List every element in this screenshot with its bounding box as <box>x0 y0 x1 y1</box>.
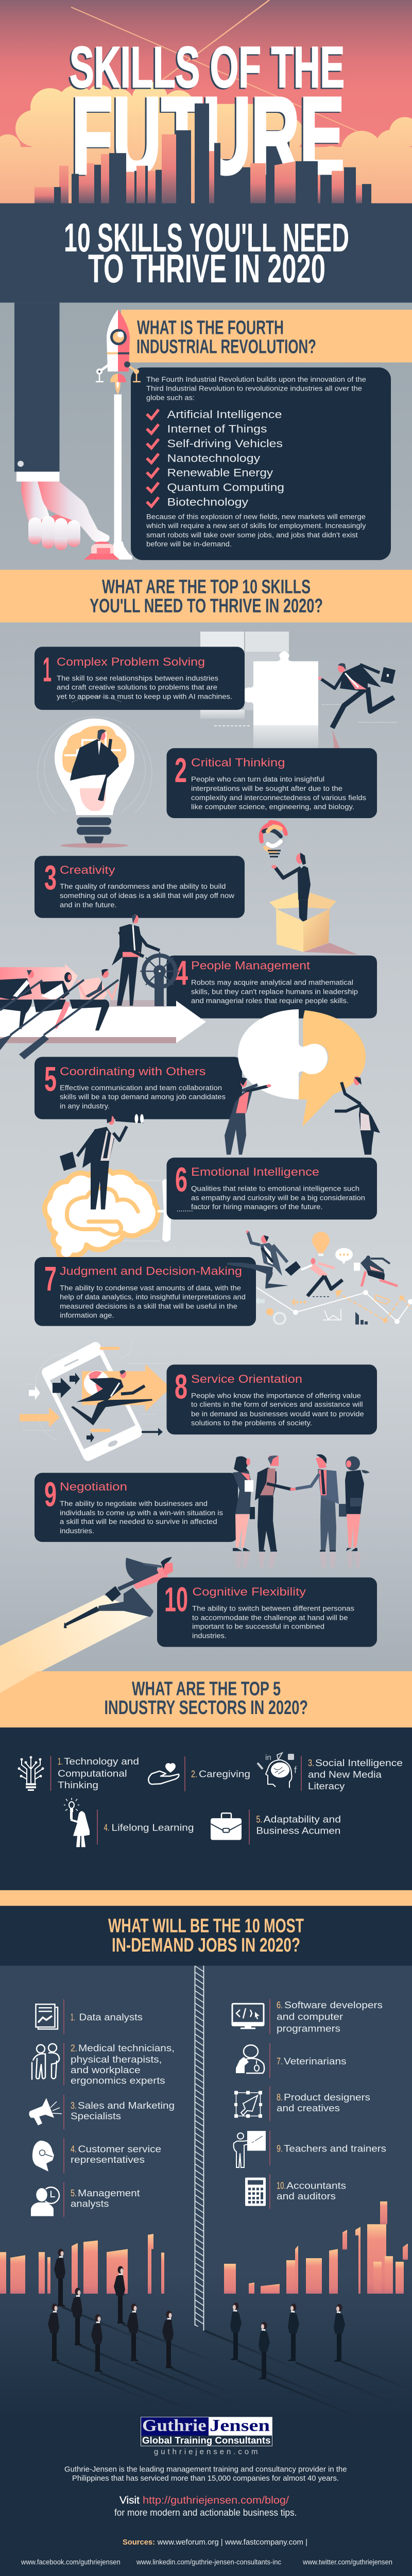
skill 2 card <box>167 748 377 818</box>
skill 6 card: Qualities that relate to emotional intelligence such <box>191 1184 359 1193</box>
skill 9 card: Negotiation <box>60 1480 127 1493</box>
technology list: Artificial Intelligence <box>167 408 282 421</box>
skill 2 card: 2 <box>175 752 187 790</box>
text panel: globe such as: <box>146 393 195 401</box>
job 6: Software developers <box>284 1999 383 2010</box>
skill 2 card: Critical Thinking <box>191 756 285 769</box>
skill 5 card: skills will be a top demand among job candidates <box>60 1093 226 1100</box>
skill 10 light beam <box>0 1595 150 1673</box>
clouds <box>0 81 412 204</box>
illustration: man with telescope <box>60 1114 144 1171</box>
grey middle background <box>0 302 412 1722</box>
sources: Sources: <box>123 2538 155 2547</box>
contrails <box>71 0 357 131</box>
about text: Guthrie-Jensen is the leading management training and consultancy provider in the <box>64 2465 347 2473</box>
skill 4 card: Robots may acquire analytical and mathematical <box>191 978 353 987</box>
icon: calculator <box>245 2178 266 2206</box>
skill 1 card: yet to appear is a must to keep up with AI machines. <box>57 692 232 700</box>
illustration: men joining speech-bubble puzzle <box>225 1009 380 1155</box>
skill 3 card: something out of ideas is a skill that will pay off now <box>60 891 235 900</box>
people and shadows <box>48 2249 412 2421</box>
Guthrie-Jensen logo: Jensen <box>210 2417 270 2435</box>
skill 8 card: to clients in the form of services and assistance will <box>191 1400 363 1409</box>
job 3: Sales and Marketing <box>78 2100 175 2111</box>
sector 1 text: Computational <box>58 1768 127 1778</box>
rocket stick and smoke <box>113 394 132 560</box>
job 2 <box>32 2043 175 2086</box>
skill 6 card: factor for hiring managers of the future. <box>191 1202 323 1211</box>
skill 2 card: interpretations will be sought after due to the <box>191 784 342 792</box>
sky background <box>0 0 412 204</box>
job 4: 4. <box>71 2144 77 2154</box>
skill 2 card: People who can turn data into insightful <box>191 775 324 783</box>
skill 3 card: 3 <box>44 859 57 897</box>
skill 10 card: Cognitive Flexibility <box>192 1585 306 1598</box>
section: top 5 industry sectors <box>0 1727 412 1890</box>
skill 7 card <box>35 1257 273 1326</box>
job 5 <box>31 2187 140 2216</box>
job 8: 8. <box>277 2092 283 2103</box>
skill 9 card <box>35 1473 238 1542</box>
job 2: ergonomics experts <box>71 2075 165 2086</box>
sector 3 text <box>308 1757 403 1791</box>
illustration: brain and splitter arrow <box>45 1161 171 1260</box>
icon: teacher at board <box>234 2131 266 2167</box>
skill 6 card <box>167 1158 377 1219</box>
skill 3 card: The quality of randomness and the ability to build <box>60 882 226 890</box>
skill 1 card <box>35 647 245 710</box>
job 4: Customer service <box>78 2144 161 2154</box>
skill 4 card: 4 <box>175 954 188 993</box>
job 10: and auditors <box>277 2191 336 2201</box>
job 6: 6. <box>277 1999 283 2010</box>
job 2: Medical technicians, <box>78 2043 175 2054</box>
website address: guthriejensen.com <box>154 2448 258 2456</box>
icon: launch button <box>84 541 120 560</box>
section heading: in-demand jobs <box>0 1906 412 1965</box>
skill 10 card: industries. <box>192 1631 227 1639</box>
section heading band: top 5 sectors <box>0 1671 412 1727</box>
icon: brain with social networks: f <box>294 1765 297 1775</box>
section: top 5 industry sectors: 5. <box>256 1814 262 1825</box>
footer social links: www.facebook.com/guthriejensen <box>21 2557 121 2566</box>
job 7 <box>236 2045 346 2073</box>
skill 4 card: People Management <box>191 959 311 972</box>
job 6 <box>232 1999 383 2033</box>
skyline in front of title <box>35 104 371 204</box>
icon: data report <box>36 2004 58 2029</box>
rowers <box>0 969 117 1030</box>
illustration: painted bulb, man in box <box>258 821 357 955</box>
skill 6 card: Emotional Intelligence <box>191 1165 319 1178</box>
sector 5 text: Business Acumen <box>256 1825 340 1836</box>
job 10: 10. <box>277 2180 286 2191</box>
skill 4 card: skills, but they can't replace humans in leadership <box>191 987 358 995</box>
icon: woman with lightbulb <box>64 1798 90 1847</box>
skill 5 card: 5 <box>44 1060 57 1098</box>
icon: caring hand <box>148 1763 179 1784</box>
icon: computer with code <box>232 2004 264 2029</box>
technology list: Internet of Things <box>167 422 267 435</box>
technology list: Self-driving Vehicles <box>167 437 283 450</box>
ladder divider <box>195 1965 204 2331</box>
job 3: Specialists <box>71 2111 121 2122</box>
illustration: puzzle piece <box>200 632 397 749</box>
skill 7 card: help of data analytics, into insightful interpretations and <box>60 1293 246 1301</box>
illustration: flying businessman <box>64 1557 173 1628</box>
illustration: businesspeople racing over chart <box>246 1230 412 1325</box>
skill 3 card <box>35 856 245 918</box>
job 5: Management <box>78 2188 140 2198</box>
text panel: The Fourth Industrial Revolution builds upon the innovation of the <box>146 375 366 383</box>
icon: manager with clock <box>31 2187 59 2216</box>
skill 1 card: and craft creative solutions to problems that are <box>57 683 217 691</box>
sector 5 text <box>256 1814 341 1836</box>
job 7: 7. <box>277 2056 283 2066</box>
section heading band: top 5 sectors: INDUSTRY SECTORS IN 2020? <box>104 1697 308 1719</box>
skill 7 card: Judgment and Decision-Making <box>60 1264 242 1277</box>
skill 7 card: 7 <box>44 1260 57 1298</box>
icon: brain with social networks: in <box>265 1754 271 1762</box>
skill 8 card: People who know the importance of offering value <box>191 1392 361 1399</box>
footer social links: www.twitter.com/guthriejensen <box>302 2557 392 2566</box>
technology list: Quantum Computing <box>167 481 284 494</box>
icon: veterinarian with dog <box>236 2045 264 2073</box>
skill 10 card: The ability to switch between different personas <box>192 1604 354 1613</box>
text panel: which will require a new set of skills for employment. Increasingly <box>146 521 366 530</box>
job 10 <box>245 2178 346 2206</box>
illustration: rocket <box>96 309 141 394</box>
job 1 <box>36 2004 143 2029</box>
job 3: 3. <box>71 2100 77 2111</box>
orange divider band <box>0 1890 412 1906</box>
job 4 <box>32 2141 161 2172</box>
skill 10 card: 10 <box>164 1581 188 1619</box>
title <box>68 35 345 198</box>
job 4: representatives <box>71 2154 145 2165</box>
sector 3 text: Social Intelligence <box>315 1757 403 1768</box>
section: top 5 industry sectors: 2. <box>191 1769 197 1779</box>
sector 1 text: Thinking <box>58 1780 98 1790</box>
technology list <box>167 408 284 508</box>
skill 8 card: solutions to the problems of society. <box>191 1419 312 1427</box>
skill 7 card: The ability to condense vast amounts of data, with the <box>60 1284 241 1292</box>
illustration: lightbulb with thinker <box>38 697 152 848</box>
text panel: Third Industrial Revolution to revolutionize industries all over the <box>146 384 362 393</box>
skill 2 card: like computer science, engineering, and biology. <box>191 803 354 811</box>
about text: Philippines that has serviced more than 15,000 companies for almost 40 years. <box>72 2475 339 2483</box>
icon: brain with social networks <box>258 1753 297 1788</box>
skill 4 card <box>167 954 377 1019</box>
illustration: sleeve and hand pressing button <box>14 302 109 550</box>
sources: www.weforum.org | www.fastcompany.com | <box>157 2538 307 2547</box>
section heading band: top 10 skills <box>0 570 412 622</box>
icon: pen tool <box>234 2091 262 2118</box>
skill 8 card <box>167 1365 377 1434</box>
heading banner: INDUSTRIAL REVOLUTION? <box>136 336 316 358</box>
icon: customer service headset <box>32 2141 54 2172</box>
skill 2 card: complexity and interconnectedness of various fields <box>191 793 366 802</box>
skill 6 card: as empathy and curiosity will be a big consideration <box>191 1193 365 1201</box>
sector 5 text: Adaptability and <box>263 1814 341 1825</box>
skill 8 card: 8 <box>175 1368 187 1406</box>
skill 10 card: to accommodate the challenge at hand will be <box>192 1614 348 1621</box>
skill 9 card: 9 <box>44 1476 57 1514</box>
technology list: Biotechnology <box>167 495 248 508</box>
skill 7 card: measured decisions is a skill that will be useful in the <box>60 1302 237 1310</box>
skill 9 card: The ability to negotiate with businesses and <box>60 1499 208 1507</box>
job 1: 1. <box>71 2011 75 2022</box>
job 3 <box>29 2098 175 2125</box>
skill 1 card: 1 <box>43 651 52 689</box>
section: in-demand jobs <box>0 1965 412 2576</box>
Guthrie-Jensen logo <box>141 2417 272 2446</box>
Guthrie-Jensen logo: Guthrie <box>142 2417 206 2435</box>
call to action: for more modern and actionable business tips. <box>114 2507 297 2518</box>
section heading: in-demand jobs: WHAT WILL BE THE 10 MOST <box>108 1915 304 1937</box>
skill 10 card <box>157 1578 377 1647</box>
sector 1 text: Technology and <box>64 1756 139 1767</box>
footer social links: www.linkedin.com/guthrie-jensen-consultants-inc <box>136 2557 281 2566</box>
footer social links <box>21 2557 392 2566</box>
lower skyline <box>0 2201 408 2294</box>
skill 1 card: Complex Problem Solving <box>57 655 205 668</box>
job 5: 5. <box>71 2188 77 2198</box>
icon: medical helper <box>32 2044 59 2080</box>
call to action: http://guthriejensen.com/blog/ <box>143 2494 289 2506</box>
skill 9 card: individuals to come up with a win-win situation is <box>60 1509 223 1517</box>
skill 6 card: 6 <box>175 1161 187 1199</box>
sector 1 text <box>58 1756 139 1790</box>
icon: megaphone <box>29 2098 62 2125</box>
sector 2 text: Caregiving <box>199 1769 250 1779</box>
oars <box>0 980 118 1059</box>
job 8 <box>234 2091 370 2118</box>
text panel <box>131 367 391 560</box>
skill 5 card: in any industry. <box>60 1102 110 1110</box>
skill 9 card: a skill that will be needed to survive in affected <box>60 1517 217 1526</box>
skill 7 card: information age. <box>60 1311 114 1319</box>
job 10: Accountants <box>286 2180 346 2191</box>
call to action <box>114 2494 297 2518</box>
skill 9 card: industries. <box>60 1527 94 1535</box>
job 8: Product designers <box>284 2092 370 2103</box>
skill 8 card: be in demand as businesses would want to provide <box>191 1410 364 1418</box>
job 6: programmers <box>277 2023 340 2033</box>
job 7: Veterinarians <box>284 2056 346 2066</box>
call to action: Visit <box>119 2494 140 2506</box>
section heading band: top 10 skills: WHAT ARE THE TOP 10 SKILLS <box>102 576 311 598</box>
subtitle <box>64 215 349 291</box>
text panel: smart robots will take over some jobs, and jobs that didn't exist <box>146 531 358 539</box>
job 5: analysts <box>71 2198 109 2209</box>
text panel: Because of this explosion of new fields, new markets will emerge <box>146 513 366 520</box>
icon: circuit bulb <box>18 1756 44 1791</box>
skill 3 card: Creativity <box>60 863 115 876</box>
sector 3 text: and New Media <box>308 1769 382 1780</box>
skill 5 card <box>35 1057 242 1119</box>
skill 5 card: Coordinating with Others <box>60 1064 205 1078</box>
illustration: handshake group <box>233 1454 370 1568</box>
skill 3 card: and in the future. <box>60 901 117 909</box>
job 6: and computer <box>277 2011 343 2022</box>
illustration: rowing team on arrow <box>0 963 206 1059</box>
job 2: physical therapists, <box>71 2054 162 2064</box>
job 9: 9. <box>277 2143 283 2154</box>
illustration: man on smartphone carrying globe <box>20 1341 170 1461</box>
job 2: 2. <box>71 2043 77 2054</box>
section: fourth industrial revolution <box>14 302 412 560</box>
skyline behind title <box>79 130 289 204</box>
section: top 5 industry sectors: 1. <box>58 1756 63 1767</box>
section heading band: top 5 sectors: WHAT ARE THE TOP 5 <box>132 1678 281 1700</box>
job separators <box>64 1999 270 2217</box>
job 8: and creatives <box>277 2103 340 2113</box>
illustration: running businessman with briefcase <box>318 663 396 755</box>
section heading: in-demand jobs: IN-DEMAND JOBS IN 2020? <box>112 1934 300 1956</box>
Guthrie-Jensen logo: Global Training Consultants <box>142 2435 271 2446</box>
job 1: Data analysts <box>79 2011 143 2022</box>
skill 4 card: and managerial roles that require people skills. <box>191 996 349 1005</box>
illustration: captain at ship wheel <box>112 914 179 1006</box>
heading banner: WHAT IS THE FOURTH <box>137 317 284 338</box>
technology list: Nanotechnology <box>167 452 260 465</box>
job 9: Teachers and trainers <box>284 2143 386 2154</box>
text panel: before will be in-demand. <box>146 540 232 548</box>
sector 4 text: Lifelong Learning <box>111 1822 194 1833</box>
technology list: Renewable Energy <box>167 466 273 479</box>
separators <box>50 1756 301 1844</box>
skill 10 card: important to be successful in combined <box>192 1622 324 1631</box>
skill 1 card: The skill to see relationships between industries <box>57 674 218 682</box>
job 9 <box>234 2131 386 2167</box>
skill 5 card: Effective communication and team collaboration <box>60 1083 222 1092</box>
skill 8 card: Service Orientation <box>191 1372 302 1385</box>
icon: briefcase <box>211 1813 242 1840</box>
check marks <box>147 410 159 506</box>
section: top 5 industry sectors: 4. <box>104 1822 109 1833</box>
dark subtitle band <box>0 204 412 302</box>
about text <box>64 2465 347 2483</box>
sector 3 text: Literacy <box>308 1781 345 1791</box>
section: top 5 industry sectors: 3. <box>308 1757 314 1768</box>
heading banner <box>121 310 412 362</box>
job 2: and workplace <box>71 2064 141 2075</box>
